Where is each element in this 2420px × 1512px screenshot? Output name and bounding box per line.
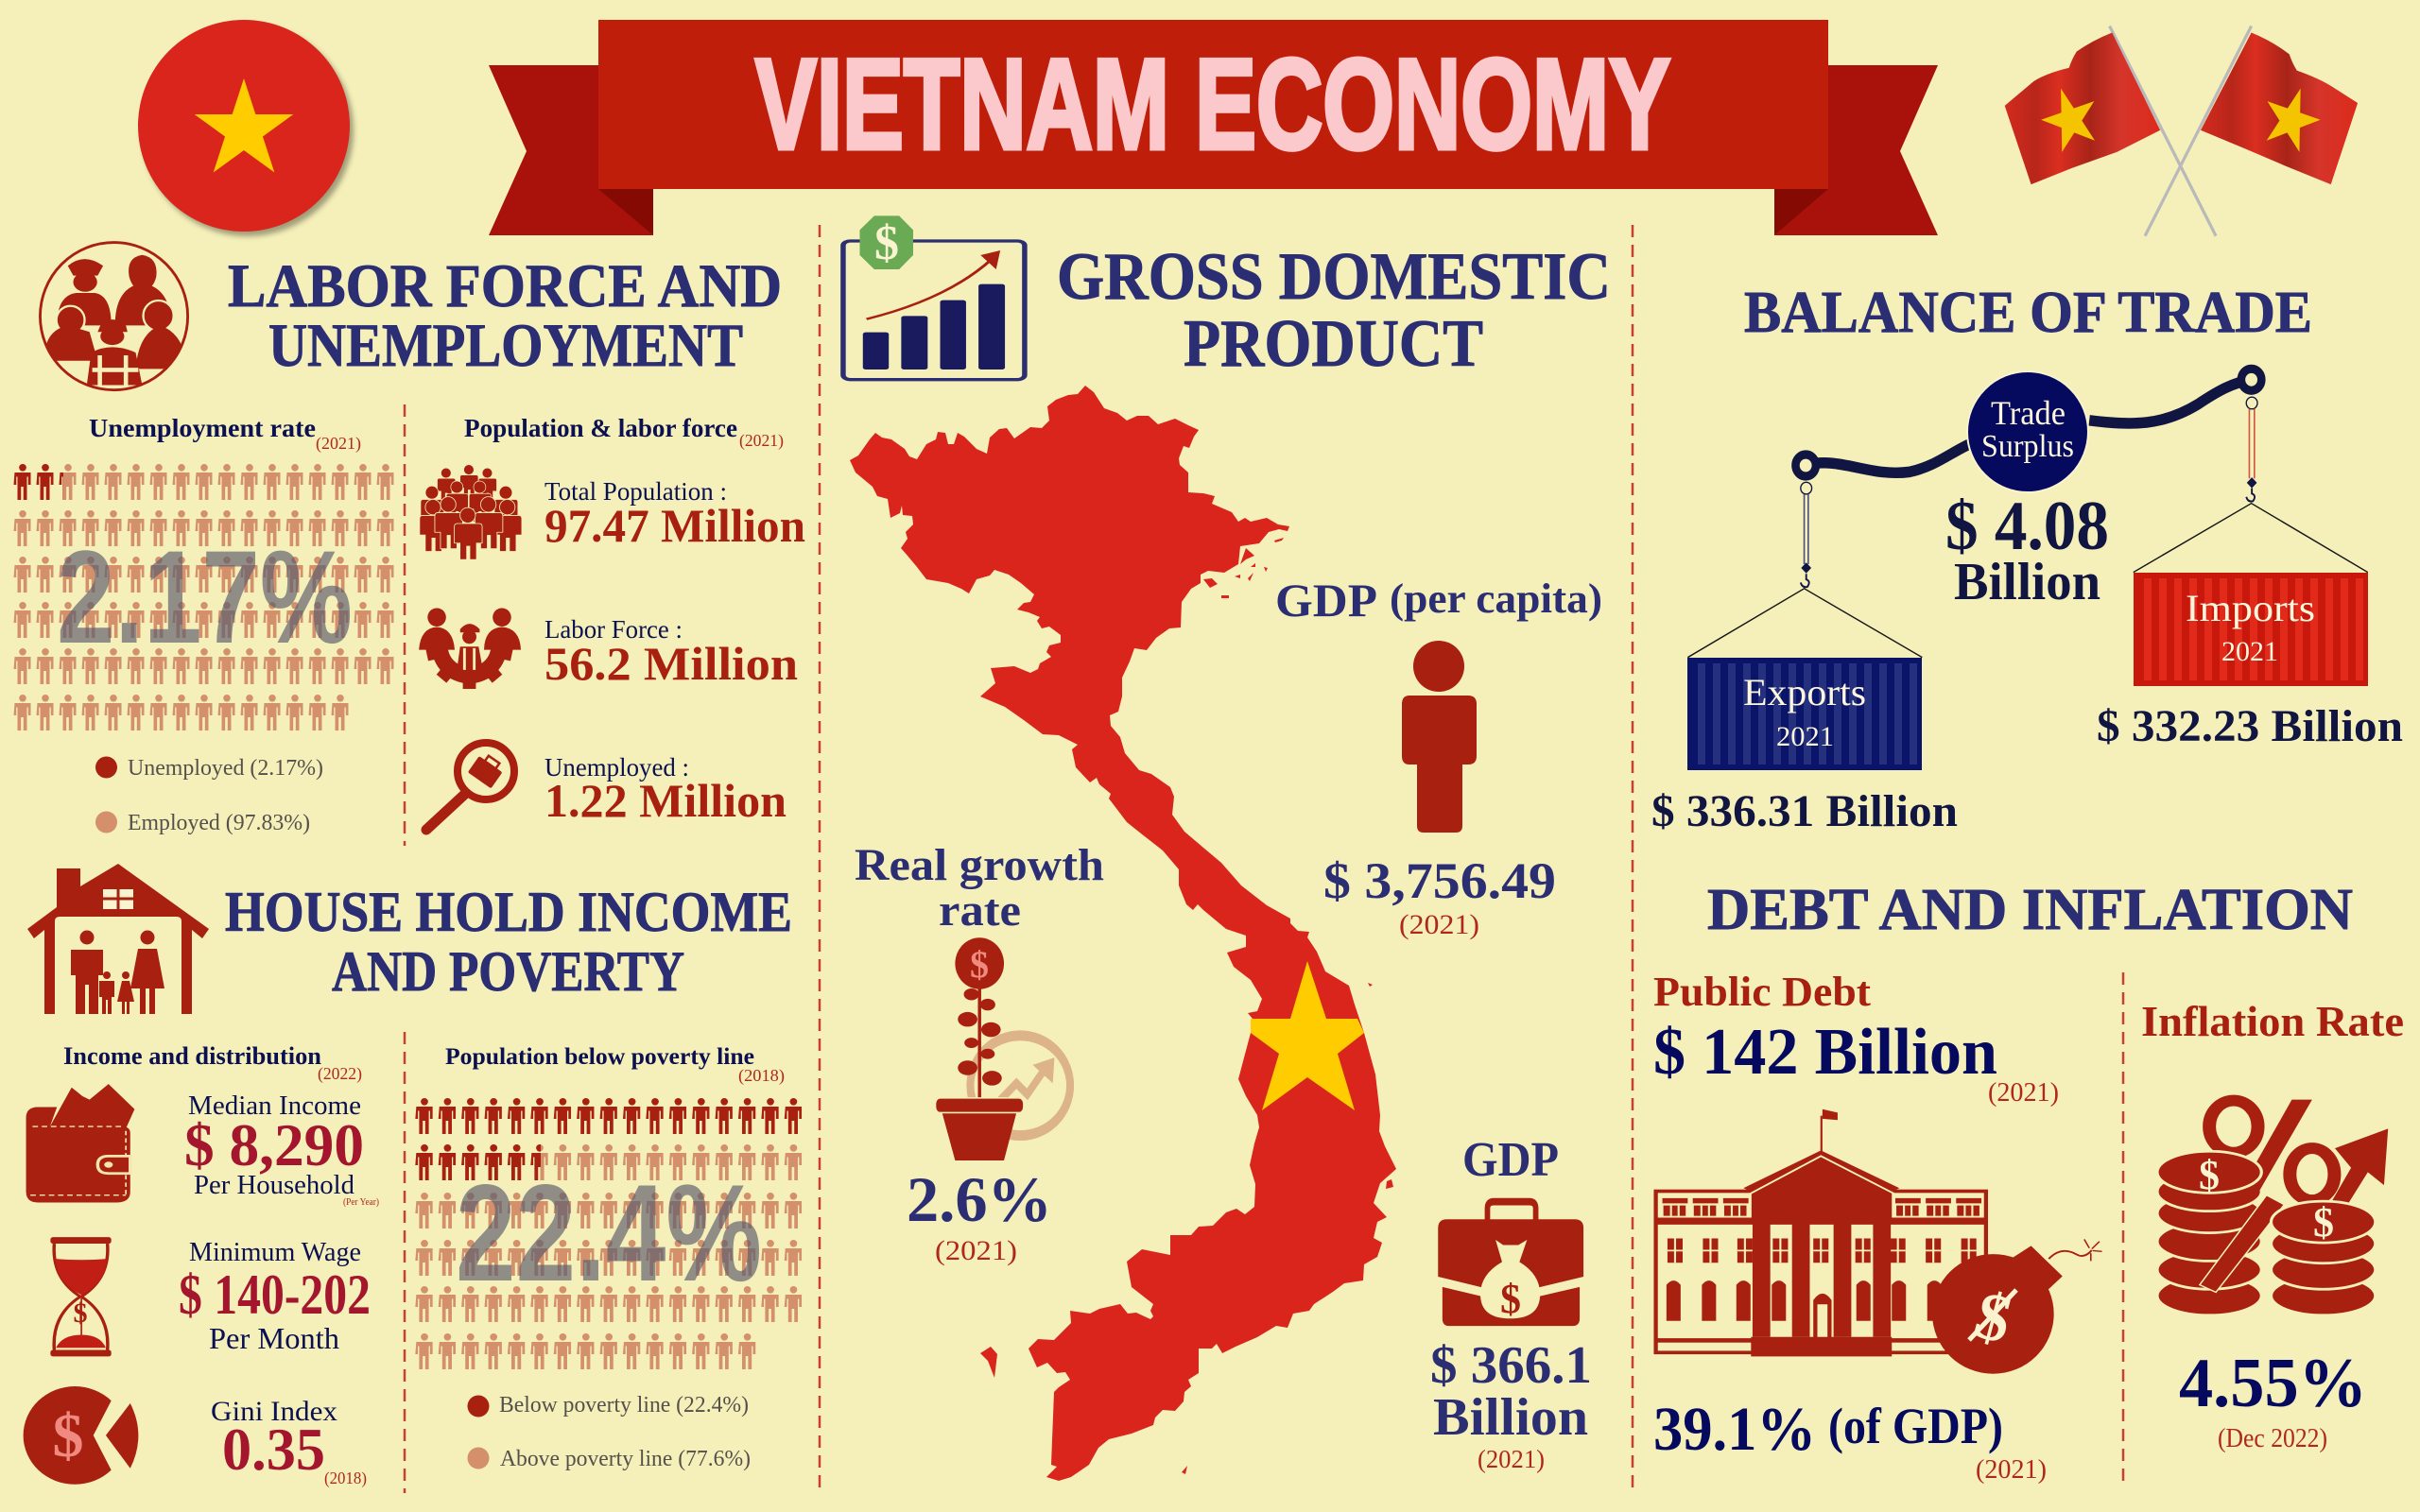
text: minimum wage: Minimum Wage [189, 1238, 361, 1267]
text: percent of GDP: 39.1% [1653, 1395, 1816, 1464]
icon: wallet [26, 1084, 134, 1202]
text: public debt: (2021) [1988, 1078, 2059, 1108]
legend: unemployment: Unemployed (2.17%) [128, 756, 323, 781]
text: trade surplus value [1945, 488, 2109, 611]
map: Vietnam [850, 386, 1396, 1481]
text: total population: 97.47 Million [544, 499, 805, 552]
icon: money plant [936, 937, 1070, 1160]
subheading: population below poverty line: (2018) [738, 1066, 785, 1086]
legend: unemployment: Employed (97.83%) [128, 811, 310, 835]
text: GDP per capita: (per capita) [1390, 576, 1602, 622]
legend: unemployment [95, 756, 323, 835]
icon: money plant: $ [970, 943, 989, 986]
icon: coins and percent arrow: $ [2313, 1199, 2334, 1246]
text: labor force: Labor Force : [544, 615, 683, 644]
container: exports: 2021 [1776, 721, 1834, 752]
text: median income: $ 8,290 [184, 1111, 364, 1178]
text: percent of GDP: (2021) [1976, 1455, 2047, 1485]
container: exports: Exports [1743, 671, 1866, 713]
icon: crane scale [1687, 369, 2368, 658]
trade surplus badge [1967, 371, 2088, 492]
container: imports: Imports [2186, 587, 2315, 629]
panel: labor force and unemployment [13, 243, 805, 835]
text: inflation rate label: Inflation Rate [2141, 997, 2404, 1045]
heading: UNEMPLOYMENT [268, 312, 743, 380]
text: total population: Total Population : [544, 477, 727, 506]
text: median income: Per Household [194, 1171, 354, 1200]
icon: population crowd [420, 465, 522, 559]
heading: DEBT AND INFLATION [1707, 878, 2353, 942]
heading: AND POVERTY [332, 940, 684, 1003]
big figure: 2.17%: 2.17% [57, 523, 353, 671]
text: GDP per capita value [1323, 852, 1556, 940]
icon: labor force gear [419, 608, 521, 689]
subheading: population below poverty line [445, 1044, 785, 1086]
text: GDP value [1430, 1336, 1592, 1473]
subheading: income and distribution: (2022) [318, 1064, 362, 1084]
container: imports [2134, 573, 2368, 686]
icon: money briefcase: $ [1500, 1276, 1521, 1322]
trade surplus badge: Surplus [1981, 429, 2074, 464]
text: GDP per capita value: (2021) [1399, 909, 1479, 940]
icon: workers circle [40, 243, 188, 390]
text: hourglass dollar: $ [74, 1297, 87, 1329]
heading [228, 252, 782, 380]
heading: BALANCE OF TRADE [1744, 281, 2312, 345]
text: GDP per capita: GDP [1275, 574, 1377, 627]
legend: poverty: Above poverty line (77.6%) [500, 1447, 751, 1471]
subheading: population and labor force [464, 414, 784, 451]
subheading: population and labor force: (2021) [739, 431, 784, 451]
icon: person [1402, 641, 1477, 833]
text: median income: Median Income [188, 1091, 361, 1121]
subheading: income and distribution [63, 1042, 362, 1084]
text: inflation value: 4.55% [2179, 1345, 2367, 1422]
text: real growth rate value [907, 1163, 1052, 1266]
icon: hourglass [50, 1237, 112, 1356]
pictogram: unemployment [13, 464, 393, 730]
text: GDP value: (2021) [1478, 1445, 1545, 1473]
icon: GDP chart [843, 215, 1025, 380]
icon: money briefcase [1438, 1202, 1583, 1326]
icon: crossed flags [2005, 26, 2358, 236]
heading: GROSS DOMESTIC [1057, 240, 1611, 314]
text: GDP value: $ 366.1 [1430, 1336, 1592, 1395]
title banner [489, 20, 1938, 235]
text: GDP per capita value: $ 3,756.49 [1323, 852, 1556, 909]
icon: magnifier [426, 743, 514, 830]
icon: GDP chart: $ [874, 216, 899, 270]
icon: family house [27, 864, 209, 1014]
icon: government building and bomb: $ [1967, 1277, 2019, 1358]
panel: gross domestic product [843, 215, 1611, 1481]
heading: HOUSE HOLD INCOME [225, 881, 792, 943]
subheading: population below poverty line: Population below poverty line [445, 1044, 754, 1070]
heading: LABOR FORCE AND [228, 252, 782, 320]
text: unemployed: Unemployed : [544, 753, 689, 782]
text: exports value: $ 336.31 Billion [1651, 786, 1958, 836]
text: gini index [211, 1396, 367, 1488]
text: percent of GDP [1653, 1395, 2047, 1485]
text: real growth rate value: (2021) [935, 1235, 1017, 1266]
panel: debt and inflation [1653, 878, 2404, 1485]
container: imports: 2021 [2221, 636, 2278, 667]
subheading: unemployment rate: (2021) [316, 434, 361, 454]
big figure: 22.4%: 22.4% [456, 1156, 762, 1310]
text: median income [184, 1091, 379, 1208]
text: gini index: 0.35 [222, 1416, 325, 1483]
text: public debt: Public Debt [1653, 969, 1871, 1015]
panel: balance of trade [1651, 281, 2403, 836]
text: trade surplus value: Billion [1954, 553, 2100, 611]
heading: PRODUCT [1184, 307, 1483, 381]
text: gini index: (2018) [324, 1469, 367, 1488]
trade surplus badge: Trade [1991, 394, 2066, 432]
text: minimum wage: Per Month [209, 1321, 339, 1355]
icon: coins and percent arrow [2157, 1100, 2388, 1315]
subheading: income and distribution: Income and distribution [63, 1042, 322, 1070]
text: real growth rate label [855, 840, 1104, 936]
text: GDP value: Billion [1433, 1388, 1588, 1447]
text: real growth rate label: Real growth [855, 840, 1104, 890]
heading [225, 881, 792, 1003]
icon: government building and bomb [1656, 1109, 2102, 1374]
title: VIETNAM ECONOMY [755, 32, 1670, 176]
legend: poverty [467, 1393, 751, 1471]
text: public debt: $ 142 Billion [1653, 1016, 1997, 1089]
subheading: unemployment rate: Unemployment rate [89, 414, 316, 442]
subheading: unemployment rate [89, 414, 361, 454]
icon: coins and percent arrow: $ [2199, 1152, 2220, 1198]
icon: gini pie [24, 1386, 138, 1485]
icon: Vietnam round flag [138, 20, 354, 236]
text: labor force: 56.2 Million [544, 637, 798, 690]
text: gini index: Gini Index [211, 1396, 337, 1427]
icon: gini pie: $ [53, 1401, 83, 1470]
text: minimum wage [179, 1238, 371, 1355]
text: inflation value: (Dec 2022) [2218, 1424, 2327, 1453]
text: labor force [544, 615, 798, 690]
panel: household income and poverty [24, 864, 802, 1488]
subheading: population and labor force: Population & labor force [464, 414, 737, 442]
text: percent of GDP: (of GDP) [1828, 1398, 2003, 1454]
container: exports [1687, 658, 1922, 770]
text: unemployed: 1.22 Million [544, 774, 786, 827]
text: public debt [1653, 969, 2059, 1108]
text: trade surplus value: $ 4.08 [1945, 488, 2109, 565]
text: median income: (Per Year) [343, 1197, 379, 1208]
text: GDP per capita [1275, 574, 1602, 627]
text: real growth rate value: 2.6% [907, 1163, 1052, 1235]
text: real growth rate label: rate [939, 885, 1021, 936]
pictogram: poverty [415, 1098, 802, 1369]
text: minimum wage: $ 140-202 [179, 1263, 371, 1326]
legend: poverty: Below poverty line (22.4%) [499, 1393, 749, 1418]
heading [1057, 240, 1611, 381]
text: GDP label: GDP [1462, 1133, 1559, 1187]
text: imports value: $ 332.23 Billion [2097, 701, 2403, 751]
